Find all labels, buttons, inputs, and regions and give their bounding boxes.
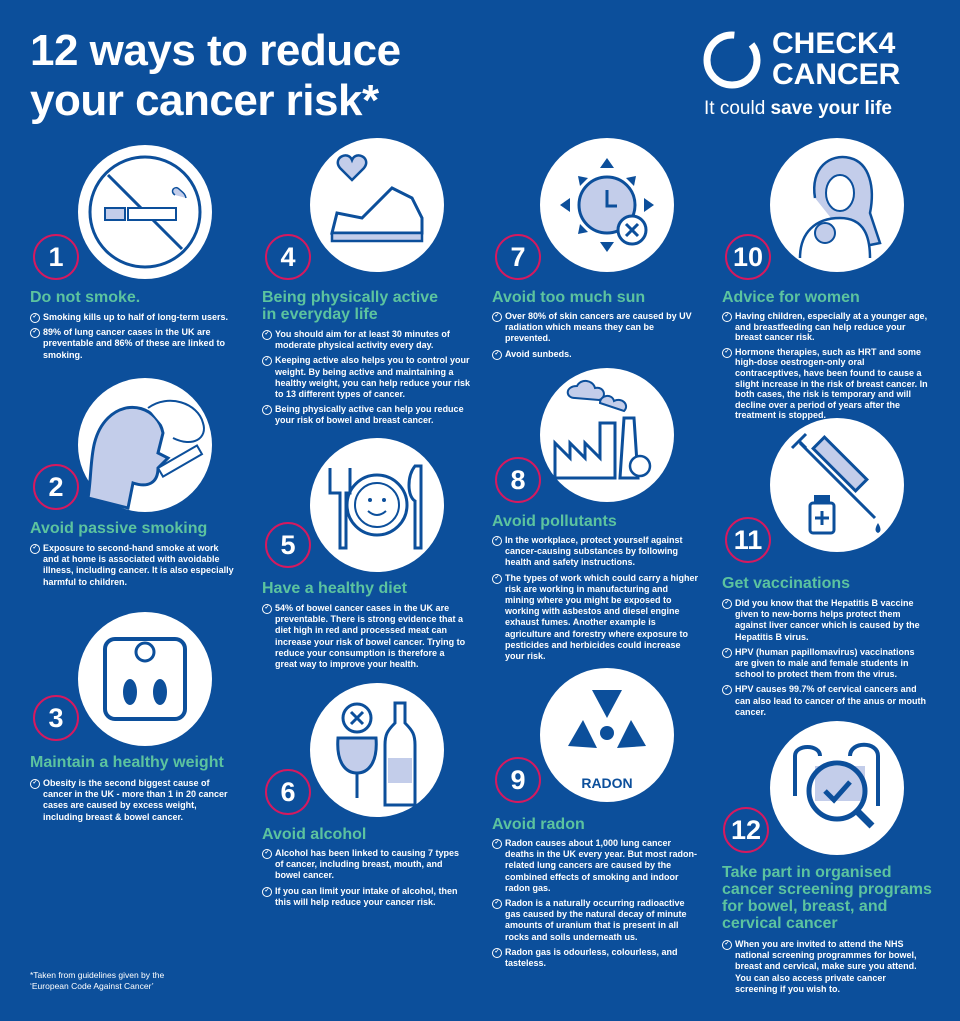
- number 9: 9: [510, 765, 526, 795]
- heading: Avoid alcohol: [262, 826, 366, 843]
- text: When you are invited to attend the NHS national screening programmes for bowel, breast and cervical, make sure you attend. You can also access private cancer screening if you wish to.: [735, 939, 917, 994]
- number 12: 12: [731, 815, 761, 845]
- icon: scales: [78, 612, 212, 746]
- heading: Avoid pollutants: [492, 513, 617, 530]
- number 11: 11: [734, 525, 762, 555]
- icon: logo ring: [704, 32, 760, 88]
- text: In the workplace, protect yourself against cancer-causing substances by following health and safety instructions.: [505, 535, 683, 567]
- text: Radon gas is odourless, colourless, and tasteless.: [505, 947, 678, 968]
- text: Hormone therapies, such as HRT and some high-dose oestrogen-only oral contraceptives, have been found to cause a slight increase in the risk of breast cancer. In both cases, the risk is temporary and will decline over a period of years after the treatment is stopped.: [735, 347, 928, 420]
- heading: Have a healthy diet: [262, 580, 407, 597]
- panel 4: [262, 138, 470, 425]
- number 10: 10: [733, 242, 763, 272]
- number 6: [265, 769, 311, 815]
- icon: passive smoking: [78, 378, 212, 512]
- number 9: [495, 757, 541, 803]
- logo: [704, 27, 900, 119]
- icon: no smoking: [78, 145, 212, 279]
- heading: Maintain a healthy weight: [30, 754, 224, 771]
- icon: factory: [540, 368, 674, 502]
- heading: Being physically active in everyday life: [262, 289, 438, 323]
- heading: Advice for women: [722, 289, 860, 306]
- number 8: [495, 457, 541, 503]
- logo text: CANCER: [772, 58, 900, 91]
- text: [492, 311, 692, 360]
- panel 8: [492, 368, 698, 661]
- icon: shoe and heart: [310, 138, 444, 272]
- panel 3: [30, 612, 228, 822]
- heading: Take part in organised cancer screening programs for bowel, breast, and cervical cancer: [722, 864, 932, 932]
- heading: Avoid passive smoking: [30, 520, 207, 537]
- logo text: CHECK4: [772, 27, 895, 60]
- number 7: 7: [510, 242, 526, 272]
- number 2: 2: [48, 472, 64, 502]
- text: If you can limit your intake of alcohol, then this will help reduce your cancer risk.: [275, 886, 458, 907]
- panel 2: [30, 378, 234, 587]
- tagline: It could save your life: [704, 98, 892, 119]
- number 1: [33, 234, 79, 280]
- text: Keeping active also helps you to control your weight. By being active and maintaining a healthy weight, you can help reduce your risk to 13 different types of cancer.: [275, 355, 470, 399]
- text: Being physically active can help you reduce your risk of bowel and breast cancer.: [275, 404, 464, 425]
- text: Smoking kills up to half of long-term users.: [43, 312, 228, 322]
- number 1: 1: [48, 242, 64, 272]
- text: Over 80% of skin cancers are caused by UV radiation which means they can be prevented.: [505, 311, 692, 343]
- number 11: [725, 517, 771, 563]
- number 3: [33, 695, 79, 741]
- number 4: 4: [280, 242, 296, 272]
- panel 6: [262, 683, 459, 907]
- logo text: [772, 27, 900, 91]
- number 6: 6: [280, 777, 296, 807]
- panel 10: [722, 138, 928, 420]
- icon: radon: RADON: [581, 775, 633, 791]
- text: 54% of bowel cancer cases in the UK are preventable. There is strong evidence that a diet high in red and processed meat can increase your risk of bowel cancer. Trying to reduce your consumption is therefore a great way to improve your health.: [275, 603, 465, 669]
- heading: Avoid radon: [492, 816, 585, 833]
- footnote: *Taken from guidelines given by the ‘European Code Against Cancer’: [30, 970, 164, 991]
- text: [722, 311, 928, 420]
- text: [262, 848, 459, 907]
- number 12: [723, 807, 769, 853]
- number 8: 8: [510, 465, 526, 495]
- text: [262, 329, 470, 425]
- text: [492, 838, 697, 968]
- text: Avoid sunbeds.: [505, 349, 572, 359]
- icon: sun clock: [540, 138, 674, 272]
- icon: mother: [770, 138, 904, 272]
- heading: Do not smoke.: [30, 289, 140, 306]
- text: Obesity is the second biggest cause of cancer in the UK - more than 1 in 20 cancer cases are caused by excess weight, including breast & bowel cancer.: [43, 778, 228, 822]
- panel 5: [262, 438, 465, 669]
- text: Radon is a naturally occurring radioactive gas caused by the natural decay of minute amounts of uranium that is present in all rocks and soils underneath us.: [505, 898, 687, 942]
- number 5: [265, 522, 311, 568]
- text: Alcohol has been linked to causing 7 types of cancer, including breast, mouth, and bowel cancer.: [275, 848, 459, 880]
- text: [492, 535, 698, 661]
- number 7: [495, 234, 541, 280]
- heading: Avoid too much sun: [492, 289, 645, 306]
- icon: vaccine: [770, 418, 904, 552]
- icon: plate and cutlery: [310, 438, 444, 572]
- icon: radon: [540, 668, 674, 802]
- text: [30, 312, 228, 360]
- text: HPV (human papillomavirus) vaccinations are given to male and female students in school to protect them from the virus.: [735, 647, 915, 679]
- text: HPV causes 99.7% of cervical cancers and can also lead to cancer of the anus or mouth cancer.: [735, 684, 926, 717]
- text: Having children, especially at a younger age, and breastfeeding can help reduce your breast cancer risk.: [735, 311, 927, 342]
- panel 1: [30, 145, 228, 360]
- text: Exposure to second-hand smoke at work and at home is associated with avoidable illness, including cancer. It is also especially harmful to children.: [43, 543, 234, 587]
- number 3: 3: [48, 703, 64, 733]
- title: 12 ways to reduce your cancer risk*: [30, 26, 401, 125]
- panel 12: [722, 721, 932, 994]
- number 5: 5: [280, 530, 296, 560]
- number 10: [725, 234, 771, 280]
- text: You should aim for at least 30 minutes of moderate physical activity every day.: [275, 329, 450, 350]
- text: [722, 598, 926, 717]
- heading: Get vaccinations: [722, 575, 850, 592]
- text: The types of work which could carry a higher risk are working in manufacturing and mining where you might be exposed to working with asbestos and diesel engine exhaust fumes. Another example is agriculture and forestry where exposure to pesticides and herbicides could increase your risk.: [505, 573, 698, 661]
- text: 89% of lung cancer cases in the UK are preventable and 86% of these are linked to smoking.: [43, 327, 225, 360]
- panel 7: [492, 138, 692, 360]
- icon: screening magnifier: [770, 721, 904, 855]
- number 2: [33, 464, 79, 510]
- panel 9: [492, 668, 697, 968]
- text: Radon causes about 1,000 lung cancer deaths in the UK every year. But most radon-related lung cancers are caused by the combined effects of smoking and indoor radon gas.: [505, 838, 697, 893]
- text: Did you know that the Hepatitis B vaccine given to new-borns helps protect them against liver cancer which is caused by the Hepatitis B virus.: [735, 598, 920, 642]
- panel 11: [722, 418, 926, 717]
- icon: alcohol: [310, 683, 444, 817]
- number 4: [265, 234, 311, 280]
